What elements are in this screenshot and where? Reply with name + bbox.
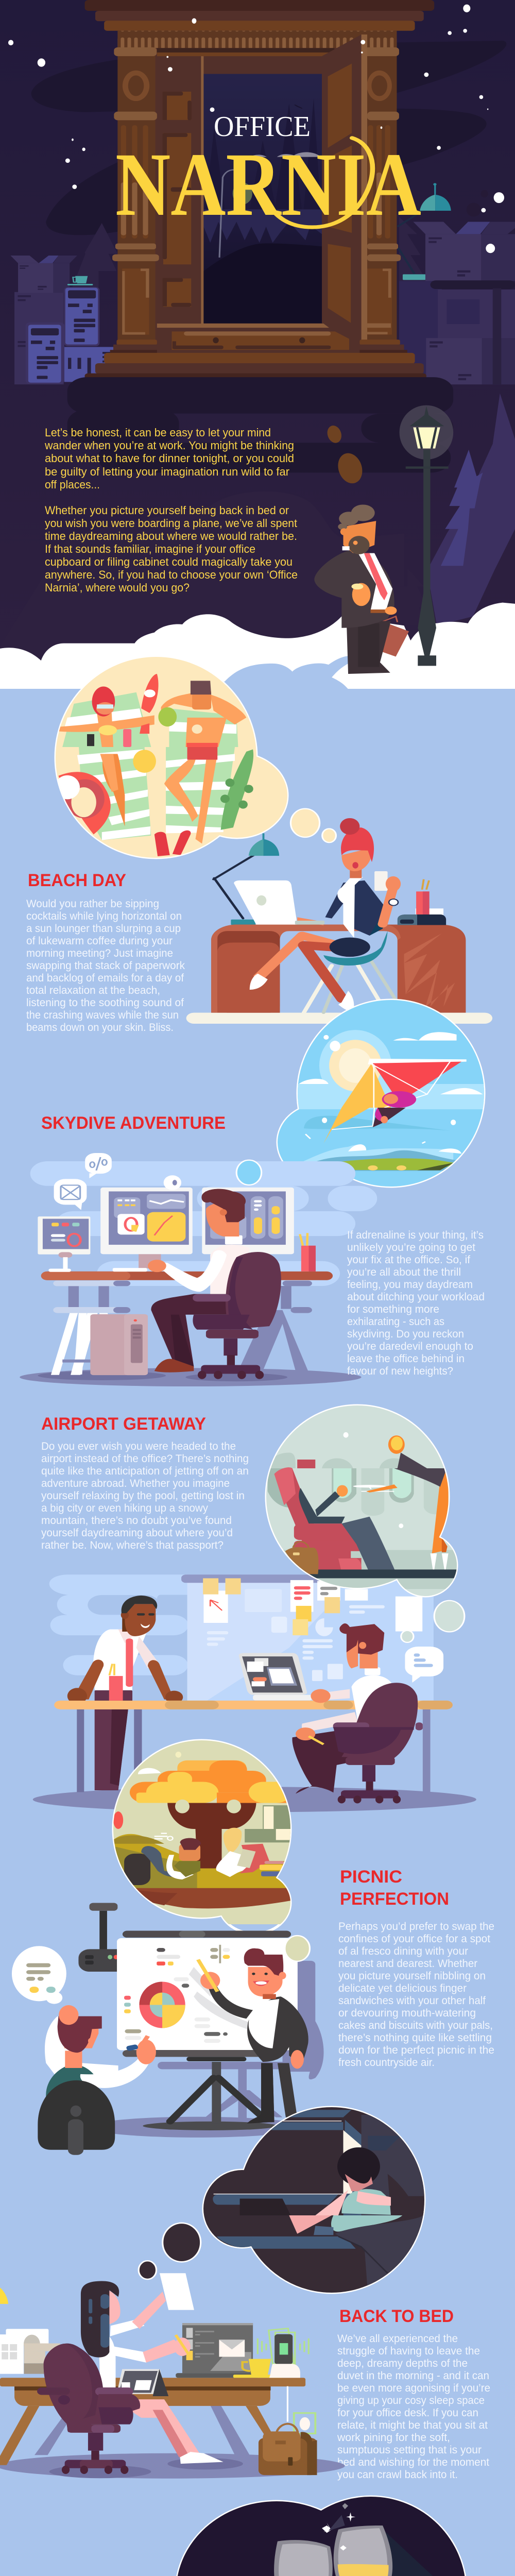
woman with tablet xyxy=(81,2273,224,2464)
text: back to bed body: work pining for the soft, xyxy=(337,2432,450,2444)
text: beach day body: Would you rather be sipping xyxy=(26,898,159,910)
floor slab xyxy=(186,1013,492,1024)
desk frame xyxy=(0,2378,305,2465)
board shadow xyxy=(158,1961,324,2119)
street lamp xyxy=(400,405,453,666)
seated man xyxy=(148,1189,281,1379)
text: airport body: quite like the anticipation of jetting off on an xyxy=(41,1465,249,1477)
text: picnic body: delicate yet delicious finger xyxy=(338,1982,467,1994)
lower beach scene xyxy=(55,747,253,856)
chat bubbles xyxy=(54,1153,112,1210)
text: beach day body: cocktails while lying horizontal on xyxy=(26,910,182,922)
thought bubbles xyxy=(401,1601,465,1642)
text: skydive body: you’re all about the thrill xyxy=(347,1266,461,1278)
text: back to bed body: We’ve all experienced the xyxy=(337,2333,458,2345)
text: intro paragraph two: If that sounds familiar, imagine if your office xyxy=(45,543,255,555)
dark sky swooshes xyxy=(31,41,506,235)
glider scene xyxy=(278,1000,484,1187)
text: skydive body: skydiving. Do you reckon xyxy=(347,1328,464,1340)
blue gaps xyxy=(88,1595,194,1655)
pencil cup xyxy=(300,1233,316,1272)
text: back to bed body: duvet in the morning - and it can xyxy=(337,2370,489,2382)
picnic ground xyxy=(112,1828,296,1908)
wall board xyxy=(181,1574,434,1701)
desk legs back xyxy=(35,2405,250,2455)
man with briefcase xyxy=(314,504,409,674)
power cable xyxy=(287,2386,315,2433)
text: skydive body: you’re daredevil enough to xyxy=(347,1341,473,1352)
text: back to bed body: giving up your cosy sleep space xyxy=(337,2395,485,2406)
trestle legs xyxy=(51,1286,312,1375)
text: beach day body: a sun lounger than slurping a cup xyxy=(26,923,181,935)
text: intro paragraph two: Whether you picture yourself being back in bed or xyxy=(45,504,289,517)
laptop and email xyxy=(176,2323,260,2378)
thought bubbles xyxy=(290,809,336,842)
text: back to bed body: sumptuous setting that is your xyxy=(337,2444,482,2456)
text: airport body: airport instead of the office? There’s nothing xyxy=(41,1453,249,1465)
blue ground xyxy=(0,689,515,747)
wall notes xyxy=(203,1578,422,1681)
text: skydive body: for something more xyxy=(347,1303,439,1315)
small thought bubble xyxy=(285,1936,310,1961)
text: picnic body: there’s nothing quite like settling xyxy=(338,2032,492,2044)
text: beach day body xyxy=(26,898,185,1033)
thought bubble circle xyxy=(236,1160,262,1185)
text: picnic body: confines of your office for a spot xyxy=(338,1933,490,1945)
panel: office meeting scene xyxy=(33,1574,476,1812)
bubble outline xyxy=(203,2107,424,2293)
text: picnic body: fresh countryside air. xyxy=(338,2057,435,2069)
desk legs xyxy=(77,1709,142,1792)
heading: Airport Getaway: AIRPORT GETAWAY xyxy=(41,1414,206,1434)
pale cloud bands xyxy=(30,1161,377,1286)
text: back to bed body: be even more agonising if you’re xyxy=(337,2382,490,2394)
cabin scene xyxy=(263,1404,461,1600)
pine trees right xyxy=(398,393,515,625)
panel: beach day thought bubble xyxy=(52,654,299,860)
text: beach day body: total relaxation at the beach, xyxy=(26,985,160,996)
text: skydive body: exhilarating - such as xyxy=(347,1316,444,1328)
tablet xyxy=(239,1653,312,1700)
text: back to bed body: deep, dreamy depths of the xyxy=(337,2358,468,2369)
seated man with pencil xyxy=(292,1623,423,1803)
office boxes left xyxy=(10,256,77,384)
chat bubble xyxy=(12,1946,66,2004)
text: picnic body: you picture yourself nibbling on xyxy=(338,1970,486,1982)
text: intro paragraph two: you wish you were boarding a plane, we’ve all spent xyxy=(45,517,297,530)
chair xyxy=(304,931,396,1013)
right desk leg xyxy=(423,1709,431,1792)
presentation board xyxy=(117,1931,298,2124)
text: back to bed body: bed and wishing for the moment xyxy=(337,2456,489,2468)
projector xyxy=(78,1903,147,1972)
upper bedroom xyxy=(213,2110,424,2216)
text: beach day body: swapping that stack of paperwork xyxy=(26,960,185,972)
text: beach day body: beams down on your skin. Bliss. xyxy=(26,1022,174,1033)
text: back to bed body: struggle of having to leave the xyxy=(337,2345,480,2357)
desk xyxy=(211,925,466,1013)
toast scene xyxy=(149,2494,474,2576)
snow drift xyxy=(0,603,515,694)
panel: woman at desk with tablet xyxy=(0,2223,345,2479)
mid hump xyxy=(0,492,404,663)
chat icons xyxy=(61,1157,107,1199)
text: airport body: adventure abroad. Whether you imagine xyxy=(41,1478,230,1489)
upper beach scene xyxy=(59,674,246,747)
title: NARNIA: NARNIA xyxy=(115,134,421,235)
autumn scene xyxy=(108,1736,299,1924)
bubble scene xyxy=(52,654,299,860)
text: intro paragraph one: about what to have for dinner tonight, or you could xyxy=(45,452,294,465)
panel: airplane bubble xyxy=(263,1404,461,1600)
chat bubble xyxy=(405,1647,443,1683)
panel: wardrobe night scene xyxy=(8,0,515,384)
thought bubbles xyxy=(139,2223,201,2279)
wardrobe base and steps xyxy=(85,324,426,384)
text: skydive body: favour of new heights? xyxy=(347,1365,453,1377)
heading: Picnic Perfection: PERFECTION xyxy=(340,1889,449,1909)
printer and pencil cup xyxy=(398,879,446,925)
text: beach day body: the crashing waves while the sun xyxy=(26,1009,179,1021)
board chart xyxy=(124,1945,230,2043)
panel: wine bubble xyxy=(176,2496,466,2576)
text: intro paragraph one: Let’s be honest, it can be easy to let your mind xyxy=(45,426,271,439)
coffee cup xyxy=(233,2359,283,2378)
small tablet xyxy=(116,2369,168,2396)
blue hill edge xyxy=(197,656,348,689)
text: picnic body xyxy=(338,1921,494,2069)
open wardrobe door xyxy=(322,35,367,352)
computer tower back xyxy=(64,287,99,346)
upper toast xyxy=(274,2503,463,2576)
panel: intro street lamp scene xyxy=(0,377,515,747)
text: airport body: Do you ever wish you were headed to the xyxy=(41,1440,236,1452)
falling snow xyxy=(8,5,504,253)
right lamp and boxes xyxy=(398,183,515,384)
bubble outline xyxy=(266,1405,457,1596)
text: intro paragraph two: anywhere. So, if you had to choose your own ‘Office xyxy=(45,568,298,581)
dark sky blobs xyxy=(67,377,453,472)
text: intro paragraph two: cupboard or filing cabinet could magically take you xyxy=(45,555,293,568)
text: intro paragraph two: Narnia’, where would you go? xyxy=(45,581,190,594)
standing man xyxy=(67,1596,183,1790)
bedroom scene xyxy=(201,2105,430,2295)
floor shadow xyxy=(89,2117,305,2138)
bubble outline xyxy=(152,2497,466,2576)
text: picnic body: down for the perfect picnic in the xyxy=(338,2044,494,2056)
text: skydive body: your fix at the office. So, if xyxy=(347,1254,470,1266)
heading: Back to Bed: BACK TO BED xyxy=(339,2307,454,2326)
yellow lamp edge xyxy=(0,2287,8,2304)
text: skydive body: If adrenaline is your thing, it’s xyxy=(347,1229,484,1241)
panel: presentation scene xyxy=(12,1903,324,2155)
wardrobe xyxy=(85,0,434,353)
text: airport body: yourself relaxing by the pool, getting lost in xyxy=(41,1490,245,1502)
upper glider sky xyxy=(296,1030,493,1109)
door opening with forest xyxy=(203,74,322,324)
text: picnic body: of al fresco dining with your xyxy=(338,1945,468,1957)
heading: Beach Day: BEACH DAY xyxy=(28,871,126,890)
text: picnic body: Perhaps you’d prefer to swap the xyxy=(338,1921,494,1933)
text: picnic body: nearest and dearest. Whether xyxy=(338,1958,477,1970)
text: picnic body: cakes and biscuits with your pals, xyxy=(338,2020,493,2031)
dark round specks xyxy=(467,190,488,216)
text: beach day body: listening to the soothing sound of xyxy=(26,997,184,1009)
right monitor xyxy=(202,1188,294,1254)
text: intro paragraph one: be guilty of letting your imagination run wild to far xyxy=(45,465,289,478)
text: airport body xyxy=(41,1440,249,1551)
brown ovals xyxy=(326,425,365,484)
brown bag xyxy=(259,2424,317,2475)
woman xyxy=(250,818,401,1011)
center monitor xyxy=(100,1175,193,1272)
narnia swash xyxy=(268,138,372,227)
text: skydive body: unlikely you’re going to get xyxy=(347,1242,475,1253)
desk top xyxy=(41,1272,333,1286)
lower cabin xyxy=(263,1467,460,1589)
computer tower front xyxy=(26,323,64,384)
paper stack xyxy=(0,2329,60,2374)
text: skydive body: leave the office behind in xyxy=(347,1353,465,1365)
floor shadow xyxy=(0,2453,345,2479)
text: airport body: yourself daydreaming about where you’d xyxy=(41,1527,233,1539)
text: skydive body xyxy=(347,1229,485,1377)
text: airport body: rather be. Now, where’s that passport? xyxy=(41,1539,224,1551)
office chair xyxy=(37,2344,140,2474)
text: back to bed body: relate, it might be that you sit at xyxy=(337,2419,488,2431)
text: back to bed body xyxy=(337,2333,490,2481)
background: night sky xyxy=(0,0,515,689)
small monitor xyxy=(38,1216,90,1272)
panel: hang glider bubble xyxy=(273,994,493,1190)
lower glider sky xyxy=(297,1108,461,1171)
text: back to bed body: you can crawl back into it. xyxy=(337,2469,458,2481)
panel: woman at desk xyxy=(186,809,492,1024)
tree canopy xyxy=(113,1752,293,1831)
text: beach day body: morning meeting? Just imagine xyxy=(26,947,173,959)
text: intro paragraph one: wander when you’re at work. You might be thinking xyxy=(44,439,294,452)
title: OFFICE: OFFICE xyxy=(214,111,311,143)
background trees xyxy=(69,217,427,296)
upper cabin xyxy=(269,1432,427,1468)
text: picnic body: sandwiches with your other half xyxy=(338,1995,486,2007)
text: intro paragraph one: off places... xyxy=(45,478,100,491)
panel: back to bed bubble xyxy=(201,2105,430,2295)
lower bedroom xyxy=(217,2215,423,2285)
text: airport body: mountain, there’s no doubt you’ve found xyxy=(41,1515,232,1527)
laptop xyxy=(234,880,324,925)
text: back to bed body: for your office desk. If you can xyxy=(337,2407,478,2419)
text: intro paragraph one xyxy=(44,426,294,491)
bubble outline xyxy=(278,1000,484,1187)
icon: teal cup xyxy=(67,276,93,285)
text: intro paragraph two: time daydreaming about where we would rather be. xyxy=(45,530,297,543)
desk lamp xyxy=(214,833,279,925)
bubble outline xyxy=(56,657,287,858)
pale cloud bands xyxy=(49,1574,188,1675)
printer stack xyxy=(64,347,117,382)
panel: picnic bubble xyxy=(108,1736,299,1934)
desk top xyxy=(54,1701,453,1709)
text: skydive body: feeling, you may daydream xyxy=(347,1279,473,1291)
seated viewer xyxy=(38,2005,156,2155)
presenter xyxy=(189,1948,308,2124)
floor shadow xyxy=(33,1787,476,1812)
floor shadow xyxy=(20,1368,362,1386)
heading: Skydive Adventure: SKYDIVE ADVENTURE xyxy=(41,1113,226,1133)
heading: Picnic Perfection: PICNIC xyxy=(340,1867,402,1887)
panel: computer desk xyxy=(20,1153,377,1386)
text: beach day body: and backlog of emails for a day of xyxy=(26,972,184,984)
heading: Picnic Perfection xyxy=(340,1867,449,1909)
text: airport body: a big city or even hiking up a snowy xyxy=(41,1502,208,1514)
bubble outline xyxy=(113,1740,290,1934)
text: beach day body: of lukewarm coffee during your xyxy=(26,935,173,947)
text: picnic body: or devouring mouth-watering xyxy=(338,2007,476,2019)
pc tower xyxy=(90,1314,148,1375)
phone on charger xyxy=(257,2328,310,2378)
text: intro paragraph two xyxy=(45,504,298,594)
text: skydive body: about ditching your workload xyxy=(347,1291,485,1303)
